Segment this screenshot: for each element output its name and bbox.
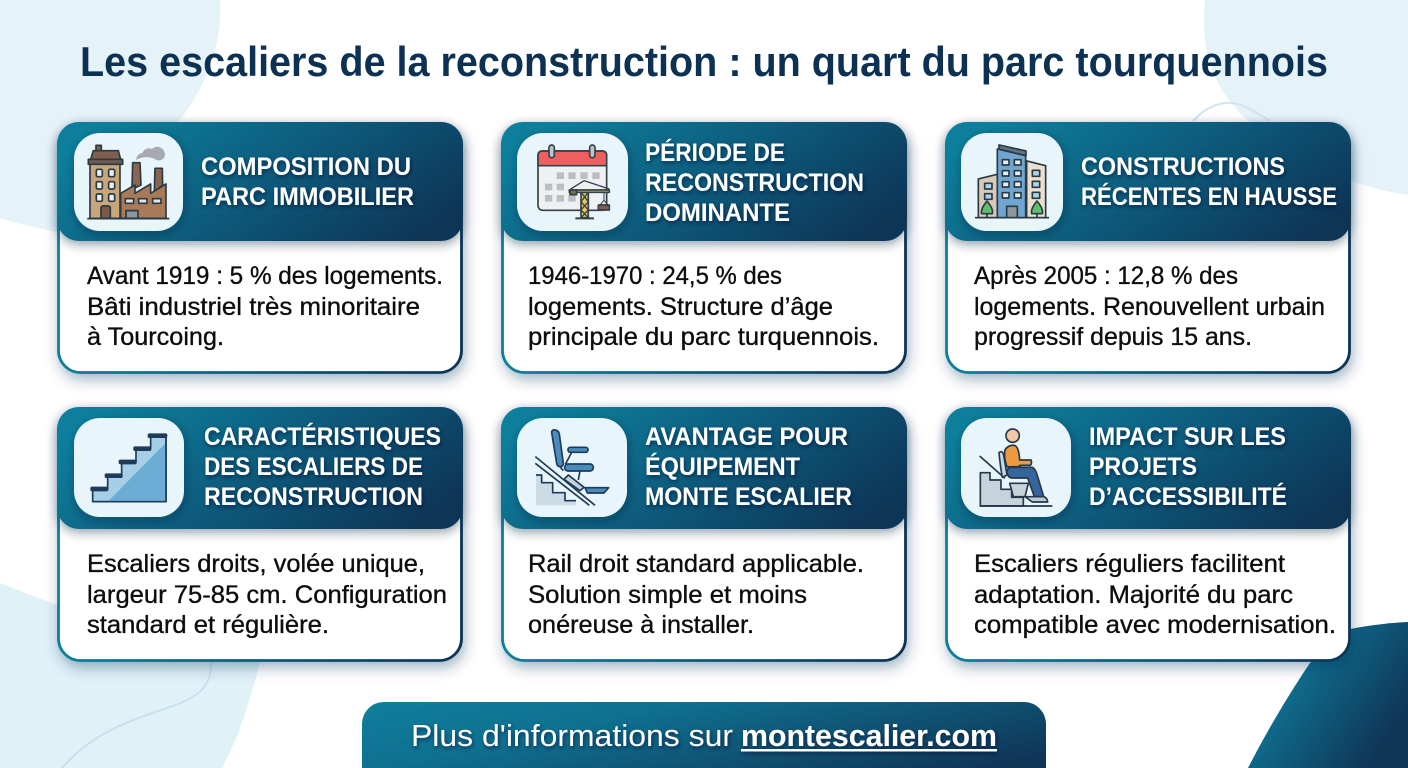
body text: Escaliers droits, volée unique, xyxy=(87,550,425,578)
background blob: bottom left xyxy=(0,583,260,768)
body text xyxy=(87,550,447,639)
body text: adaptation. Majorité du parc xyxy=(974,581,1293,609)
heading: CONSTRUCTIONS xyxy=(1081,153,1285,181)
heading xyxy=(645,423,852,511)
heading: PROJETS xyxy=(1089,453,1197,481)
heading: D’ACCESSIBILITÉ xyxy=(1089,482,1287,511)
heading: RÉCENTES EN HAUSSE xyxy=(1081,182,1337,211)
panel: constructions récentes xyxy=(945,122,1351,372)
body text: progressif depuis 15 ans. xyxy=(974,323,1252,351)
body text: Rail droit standard applicable. xyxy=(528,550,864,578)
footer text xyxy=(411,718,997,753)
icon: modern buildings xyxy=(961,133,1063,231)
panel: avantage pour équipement xyxy=(501,407,907,660)
icon: straight staircase xyxy=(74,418,184,517)
body text xyxy=(528,550,864,639)
body text: Solution simple et moins xyxy=(528,581,807,609)
heading xyxy=(645,138,864,227)
body text xyxy=(528,262,879,351)
body text: compatible avec modernisation. xyxy=(974,611,1336,639)
body text: logements. Renouvellent urbain xyxy=(974,293,1325,321)
panel: caractéristiques des escaliers xyxy=(57,407,463,660)
panel: période de reconstruction xyxy=(501,122,907,372)
header band xyxy=(57,122,463,241)
body text xyxy=(974,262,1325,351)
icon: stairlift chair on rail xyxy=(517,418,627,517)
heading: PARC IMMOBILIER xyxy=(201,183,414,211)
icon: calendar and crane xyxy=(517,133,628,231)
heading: RECONSTRUCTION xyxy=(645,169,864,197)
heading: DES ESCALIERS DE xyxy=(204,453,423,481)
header band xyxy=(945,122,1351,241)
icon: old building and factory xyxy=(74,133,183,231)
panel: impact sur les projets xyxy=(945,407,1351,660)
heading: AVANTAGE POUR xyxy=(645,423,848,451)
header band xyxy=(501,122,907,241)
footer banner xyxy=(362,702,1046,768)
body text: standard et régulière. xyxy=(87,611,329,639)
footer text: Plus d'informations sur xyxy=(411,718,733,753)
body text xyxy=(87,262,443,351)
background line: bottom left xyxy=(62,662,211,768)
body text: Après 2005 : 12,8 % des xyxy=(974,262,1238,290)
heading: IMPACT SUR LES xyxy=(1089,423,1286,451)
body text: principale du parc turquennois. xyxy=(528,323,879,351)
heading xyxy=(1081,153,1337,211)
heading xyxy=(201,153,414,211)
body text xyxy=(974,550,1336,639)
footer text: montescalier.com xyxy=(741,718,997,753)
heading: DOMINANTE xyxy=(645,199,790,227)
body text: à Tourcoing. xyxy=(87,323,224,351)
heading: ÉQUIPEMENT xyxy=(645,452,800,481)
heading: PÉRIODE DE xyxy=(645,138,785,167)
body text: Bâti industriel très minoritaire xyxy=(87,293,420,321)
body text: largeur 75-85 cm. Configuration xyxy=(87,581,447,609)
heading: CARACTÉRISTIQUES xyxy=(204,422,441,451)
background blob: top right xyxy=(1204,0,1408,195)
background blob: top left xyxy=(0,0,221,233)
heading xyxy=(204,422,441,511)
heading: MONTE ESCALIER xyxy=(645,483,852,511)
heading xyxy=(1089,423,1287,511)
header band xyxy=(501,407,907,529)
body text: Avant 1919 : 5 % des logements. xyxy=(87,262,443,290)
body text: logements. Structure d’âge xyxy=(528,293,833,321)
body text: onéreuse à installer. xyxy=(528,611,754,639)
background line: top right xyxy=(1193,103,1270,121)
heading: RECONSTRUCTION xyxy=(204,483,423,511)
body text: Escaliers réguliers facilitent xyxy=(974,550,1285,578)
header band xyxy=(945,407,1351,529)
icon: person on stairlift xyxy=(961,418,1071,517)
title: Les escaliers de la reconstruction : un quart du parc tourquennois xyxy=(80,38,1328,85)
body text: 1946-1970 : 24,5 % des xyxy=(528,262,782,290)
heading: COMPOSITION DU xyxy=(201,153,411,181)
header band xyxy=(57,407,463,529)
background blob: bottom right xyxy=(1248,622,1408,768)
panel: composition du parc immobilier xyxy=(57,122,463,372)
